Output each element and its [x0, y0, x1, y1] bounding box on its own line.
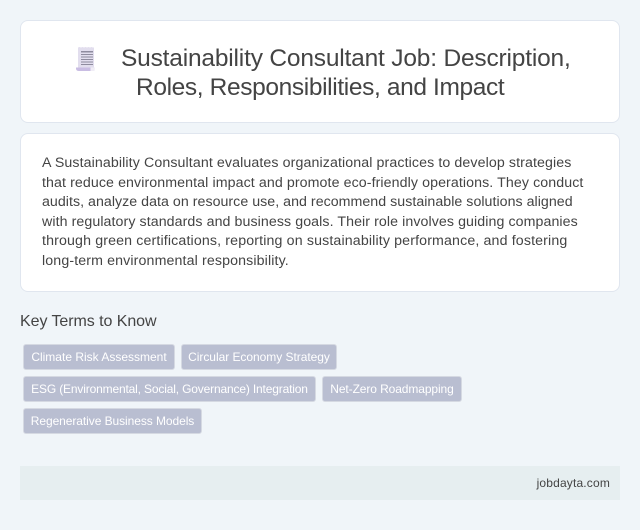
- tag: net-zero roadmapping: Net-Zero Roadmapping: [330, 382, 454, 396]
- tag: climate risk assessment: Climate Risk Assessment: [31, 350, 167, 364]
- heading: key terms: Key Terms to Know: [20, 313, 157, 330]
- tag: regenerative business models: Regenerative Business Models: [31, 414, 194, 428]
- tag: net-zero roadmapping: [322, 376, 462, 402]
- panel: title card: [20, 20, 620, 123]
- description line 6: long-term environmental responsibility.: [42, 252, 289, 268]
- tag: circular economy strategy: [181, 344, 337, 370]
- tag: climate risk assessment: [23, 344, 175, 370]
- footer text: jobdayta.com: [537, 476, 610, 490]
- tag: circular economy strategy: Circular Economy Strategy: [188, 350, 330, 364]
- description line 5: through green certifications, reporting on sustainability performance, and fostering: [42, 233, 567, 249]
- title line 2: Roles, Responsibilities, and Impact: [136, 74, 504, 101]
- title line 1: Sustainability Consultant Job: Description,: [121, 45, 571, 72]
- icon: paper receipt document: [76, 47, 95, 71]
- description line 1: A Sustainability Consultant evaluates organizational practices to develop strategies: [42, 155, 572, 171]
- description line 4: with regulatory standards and business goals. Their role involves guiding companies: [42, 214, 578, 230]
- description line 2: that reduce environmental impact and promote eco-friendly operations. They conduct: [42, 174, 583, 190]
- description line 3: audits, analyze data on resource use, and recommend sustainable solutions aligned: [42, 194, 573, 210]
- tag: ESG integration: ESG (Environmental, Social, Governance) Integration: [31, 382, 308, 396]
- tag: ESG integration: [23, 376, 316, 402]
- panel: description card: [20, 133, 620, 292]
- footer bar: [20, 466, 620, 500]
- tag: regenerative business models: [23, 408, 202, 434]
